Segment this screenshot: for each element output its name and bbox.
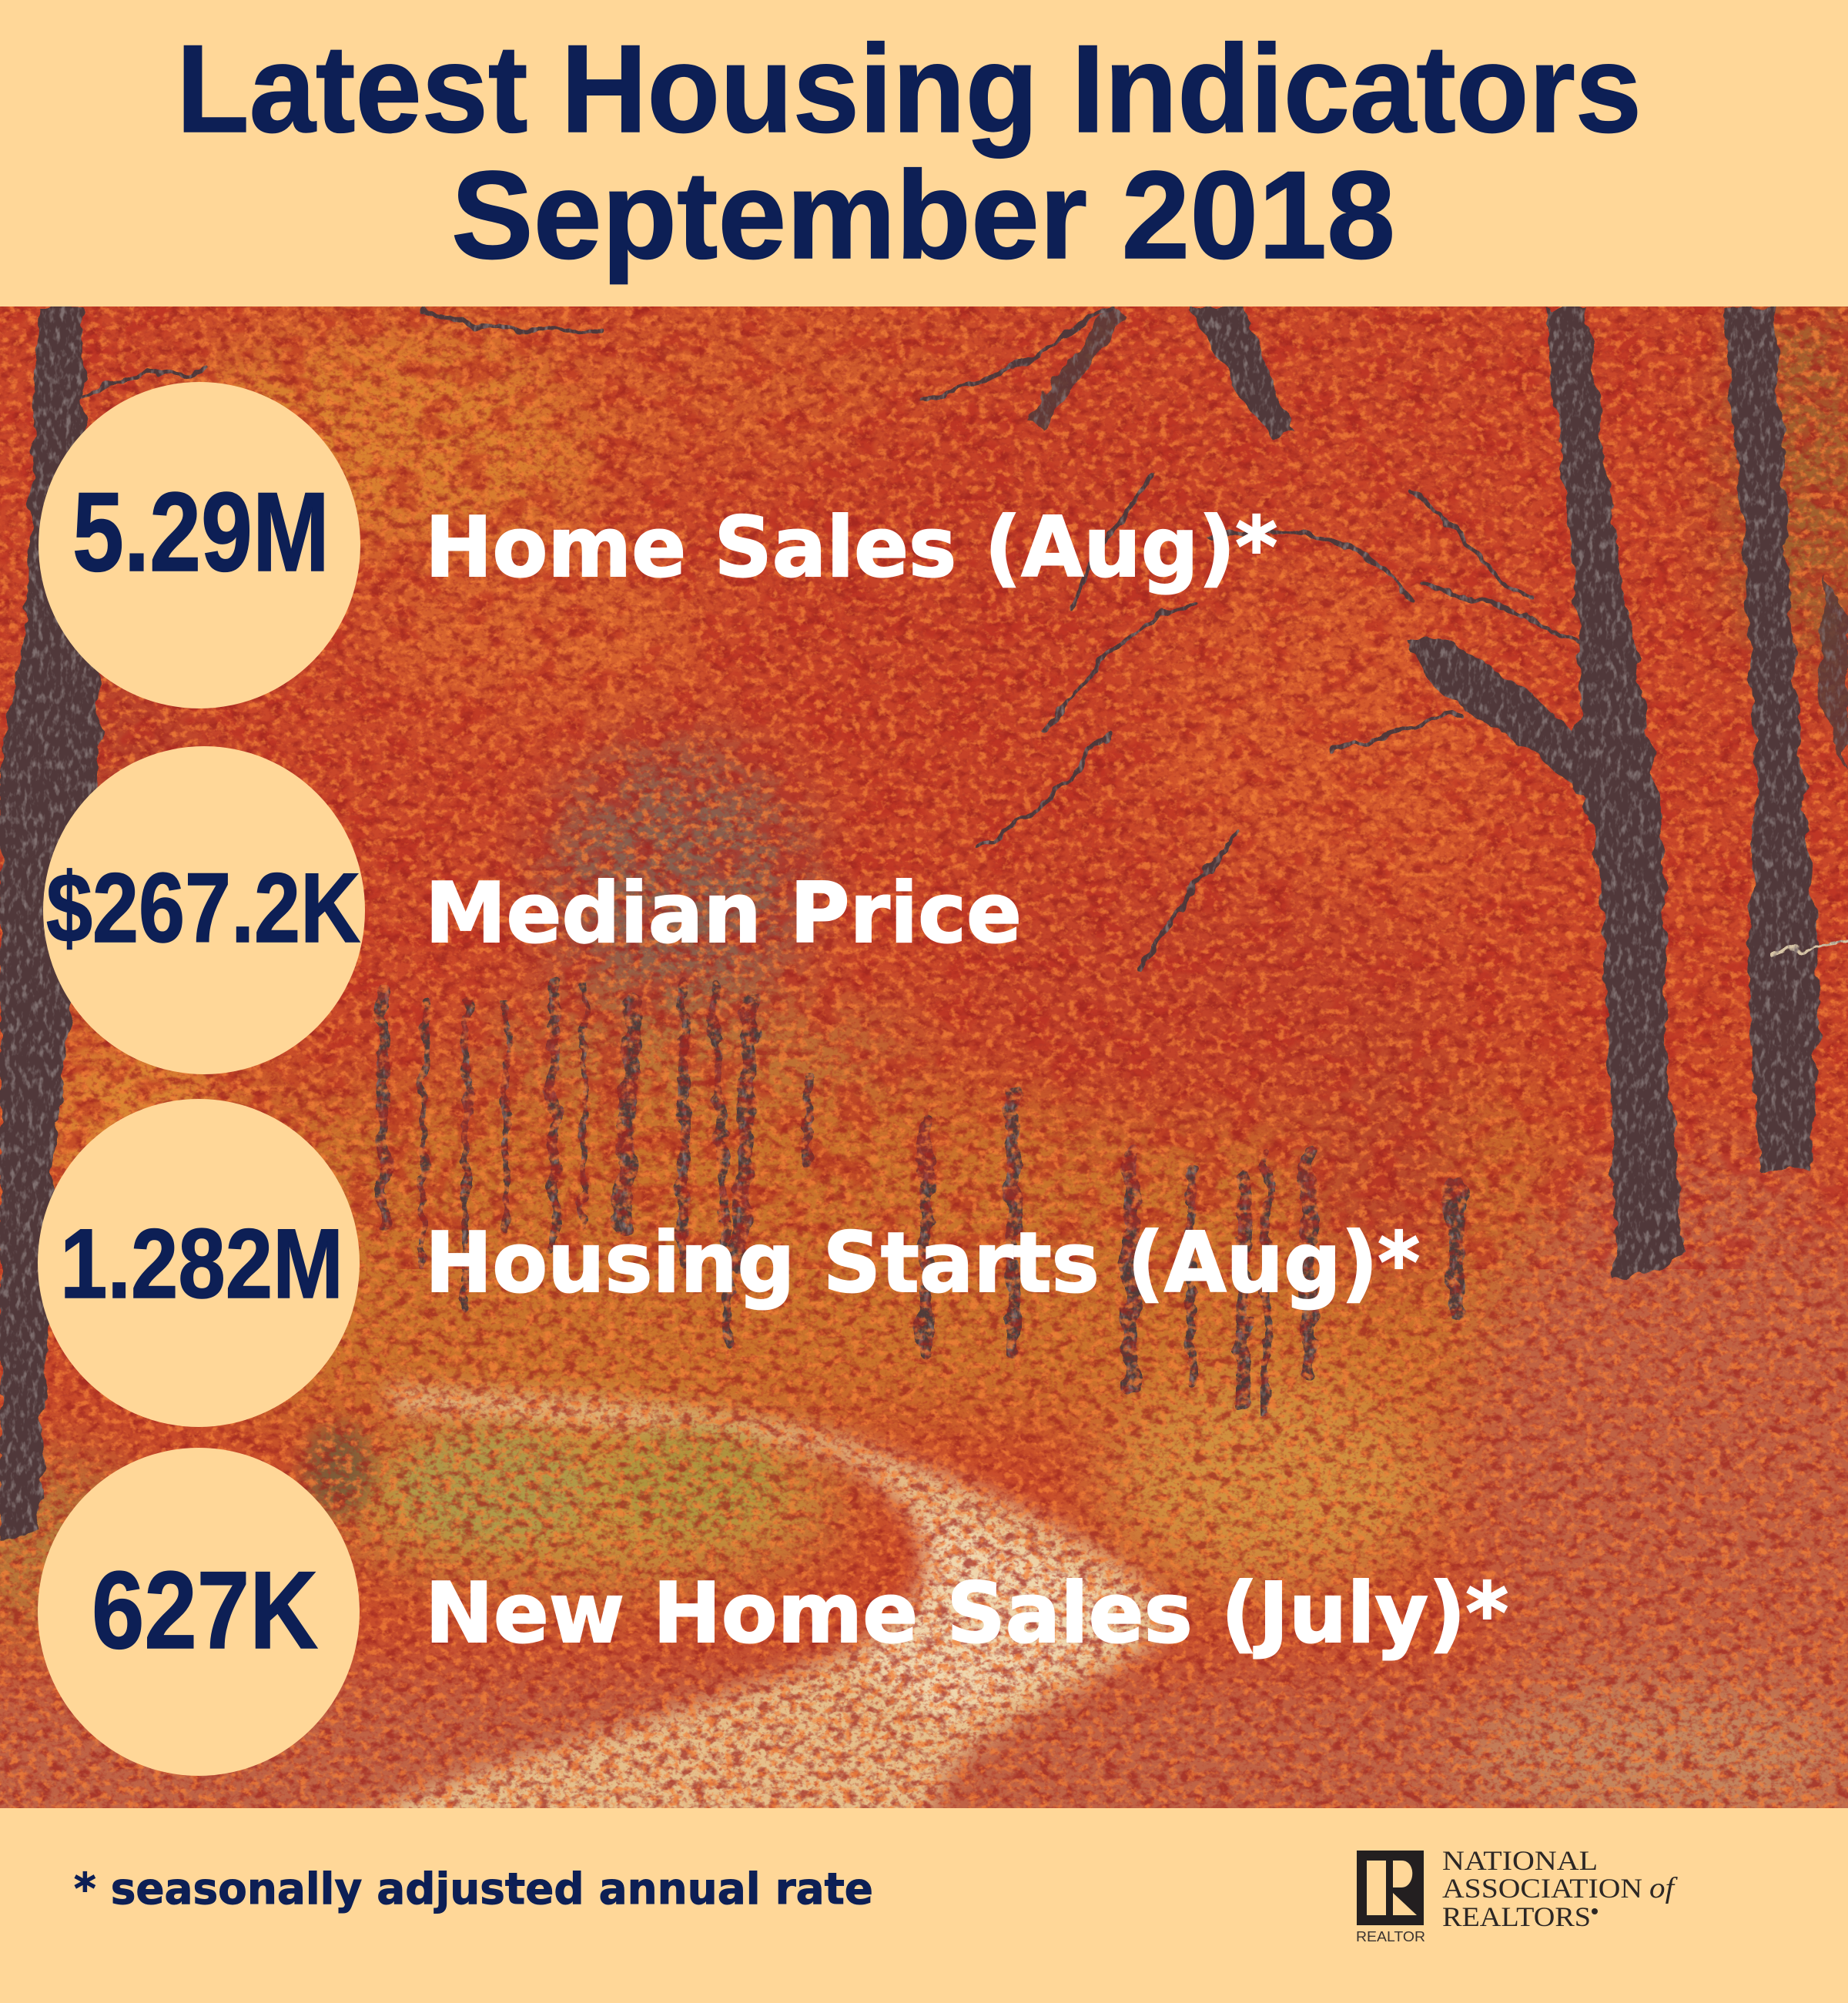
footnote: * seasonally adjusted annual rate [74, 1864, 873, 1914]
badge [43, 746, 365, 1074]
value: 1.282M [60, 1209, 343, 1319]
green bushes [304, 1425, 778, 1544]
label: New Home Sales (July)* [425, 1566, 1508, 1662]
badge [38, 1448, 360, 1776]
value: 627K [92, 1549, 318, 1672]
distant tree trunks [383, 986, 1455, 1409]
dirt path [346, 1374, 1187, 1808]
stat: new home sales [38, 1448, 1508, 1776]
stat: home sales [38, 382, 1277, 708]
leaf texture [0, 306, 1848, 1808]
value: 5.29M [72, 469, 330, 595]
title [176, 19, 1642, 285]
icon: realtor R: REALTOR [1356, 1929, 1425, 1944]
large tree trunks [0, 306, 1848, 1540]
badge [38, 1099, 360, 1427]
label: Median Price [425, 866, 1022, 962]
logo: national association of realtors [1356, 1845, 1678, 1944]
wordmark: ASSOCIATION [1442, 1873, 1642, 1904]
wordmark: of [1649, 1872, 1678, 1904]
title: Latest Housing Indicators [176, 19, 1642, 159]
wordmark: REALTORS [1442, 1901, 1591, 1932]
stat: median price [43, 746, 1022, 1074]
value: $267.2K [46, 853, 360, 963]
foliage clumps [0, 306, 1848, 1269]
wordmark [1442, 1845, 1678, 1932]
wordmark: NATIONAL [1442, 1845, 1598, 1876]
badge [38, 382, 360, 708]
title: September 2018 [451, 146, 1395, 285]
label: Housing Starts (Aug)* [425, 1215, 1420, 1311]
icon: realtor R [1356, 1851, 1425, 1944]
stat: housing starts [38, 1099, 1420, 1427]
thin branches [77, 308, 1848, 970]
label: Home Sales (Aug)* [425, 500, 1277, 596]
